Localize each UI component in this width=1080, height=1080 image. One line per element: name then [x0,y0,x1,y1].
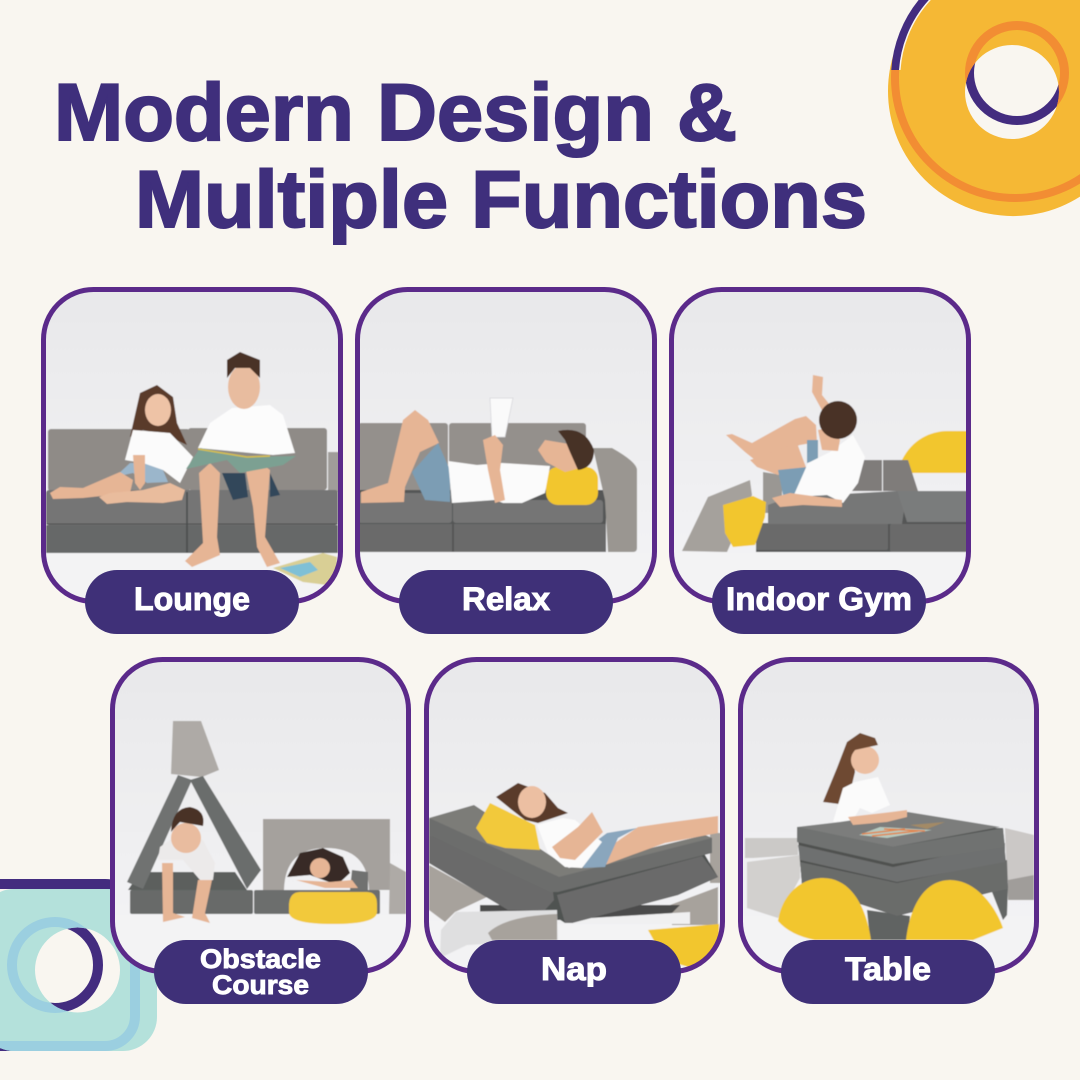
panel: relax [358,290,654,634]
card border [740,660,1036,972]
card border [672,290,968,602]
label pill: Obstacle Course [154,940,368,1004]
label pill: Obstacle Course: Obstacle [200,944,321,974]
panel: obstacle course [112,660,408,1004]
label pill: Nap: Nap [541,951,607,987]
decoration: yellow donut with rings [888,0,1080,216]
panel: lounge [44,290,340,634]
panel: nap [426,660,722,1004]
boy [222,473,280,500]
card border [426,660,722,972]
books [273,553,337,585]
label pill: Table: Table [845,951,931,987]
photo: boy playing on sofa [674,292,966,553]
photo: boy lying on sofa [360,292,652,553]
photo: tent and arch [113,660,408,974]
label pill: Relax [399,570,613,634]
photo: kids on sofa [44,290,340,603]
title: Modern Design & [54,68,737,158]
photo: girl reclining [427,660,722,975]
decoration: teal rounded square with rings [0,884,157,1051]
label pill: Obstacle Course: Course [212,970,309,1000]
label pill: Nap [467,940,681,1004]
panel: indoor gym [672,290,968,634]
label pill: Indoor Gym [712,570,926,634]
label pill: Table [781,940,995,1004]
label pill: Lounge [85,570,299,634]
card border [112,660,408,972]
label pill: Indoor Gym: Indoor Gym [726,581,912,617]
title: Multiple Functions [135,155,867,245]
title [54,68,867,245]
girl [130,385,187,445]
card border [358,290,654,602]
panel: table [740,660,1036,1004]
photo: girl at table [743,662,1034,940]
label pill: Lounge: Lounge [134,581,250,617]
label pill: Relax: Relax [462,581,550,617]
card border [44,290,340,602]
